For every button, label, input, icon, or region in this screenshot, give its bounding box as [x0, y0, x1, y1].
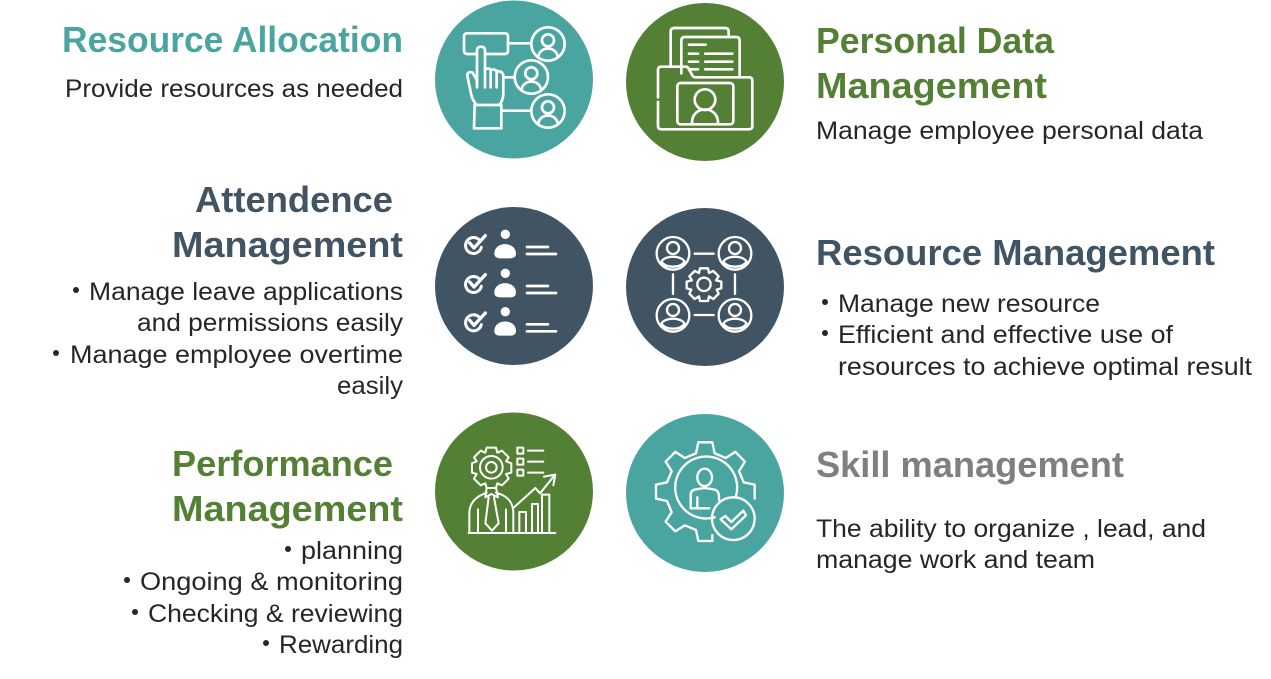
heading: attendence management: Attendence — [195, 179, 393, 220]
panel: performance text: Management — [172, 488, 403, 529]
list: attendance bullets: Manage leave applications — [89, 278, 403, 306]
panel: skill management text — [816, 444, 1206, 574]
panel: attendance text: Management — [172, 224, 403, 265]
icon: resource management circle — [626, 208, 784, 366]
list: performance bullets: Checking & reviewing — [148, 600, 403, 628]
list: resource management bullets: Efficient and effective use of — [838, 321, 1173, 349]
panel: resource management text — [816, 232, 1252, 381]
icon: attendance circle — [435, 207, 593, 365]
panel: attendance text — [53, 179, 404, 400]
list: attendance bullets: easily — [337, 372, 404, 400]
list: attendance bullets — [53, 278, 404, 400]
text: skill management description: The ability to organize , lead, and — [816, 515, 1206, 543]
text: personal data description: Manage employee personal data — [816, 117, 1203, 145]
panel: personal data text: Management — [816, 65, 1047, 106]
list: performance bullets: Rewarding — [279, 631, 403, 659]
panel: skill management text: manage work and team — [816, 546, 1095, 574]
heading: resource management: Resource Management — [816, 232, 1215, 273]
icon: performance circle — [435, 412, 593, 570]
list: performance bullets — [124, 537, 403, 659]
list: resource management bullets: resources to achieve optimal result — [838, 353, 1252, 381]
list: resource management bullets: Manage new resource — [838, 290, 1100, 318]
list: attendance bullets: Manage employee overtime — [70, 341, 403, 369]
icon: personal data circle — [626, 3, 784, 161]
list: performance bullets: planning — [301, 537, 403, 565]
list: performance bullets: Ongoing & monitoring — [140, 568, 403, 596]
icon: skill management circle — [626, 414, 784, 572]
panel: performance text — [124, 443, 403, 659]
panel: personal data text — [816, 20, 1203, 145]
list: attendance bullets: and permissions easily — [137, 309, 404, 337]
heading: performance management: Performance — [172, 443, 393, 484]
panel: resource allocation text — [62, 19, 403, 103]
heading: personal data management: Personal Data — [816, 20, 1055, 61]
heading: skill management: Skill management — [816, 444, 1124, 485]
icon: resource allocation circle — [435, 0, 593, 158]
text: resource allocation description: Provide resources as needed — [65, 75, 403, 103]
list: resource management bullets — [822, 290, 1252, 381]
heading: resource allocation: Resource Allocation — [62, 19, 403, 60]
